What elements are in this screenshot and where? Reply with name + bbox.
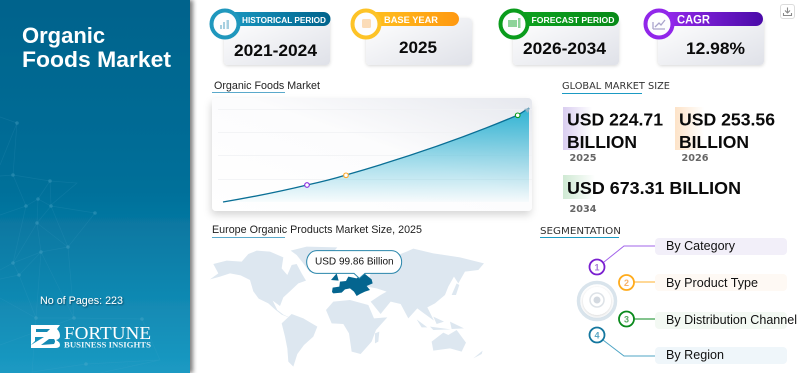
heading: global market size: GLOBAL MARKET SIZE bbox=[562, 81, 670, 92]
marker: 2034 bbox=[515, 113, 520, 118]
diagram: segmentation bbox=[578, 238, 797, 364]
stat: 2025 market size: USD 224.71 bbox=[567, 110, 663, 130]
segment 1: By Category bbox=[590, 238, 787, 274]
segment 1: By Category: 1 bbox=[594, 262, 600, 272]
card: historical period bbox=[212, 10, 330, 65]
stat: 2025 market size bbox=[563, 107, 663, 164]
stat: 2025 market size: 2025 bbox=[570, 153, 597, 164]
segment 2: By Product Type: By Product Type bbox=[666, 276, 758, 290]
heading: segmentation: SEGMENTATION bbox=[540, 226, 621, 237]
segment 3: By Distribution Channel: By Distribution Channel bbox=[666, 313, 797, 327]
logo: Fortune Business Insights: FORTUNE bbox=[64, 323, 151, 343]
card: forecast period: FORECAST PERIOD bbox=[532, 15, 614, 25]
card: base year bbox=[352, 10, 472, 65]
card: CAGR: CAGR bbox=[677, 14, 711, 26]
card: historical period: HISTORICAL PERIOD bbox=[242, 15, 326, 25]
heading: Organic Foods Market: Organic Foods Market bbox=[214, 80, 320, 92]
stat: 2034 market size bbox=[563, 175, 741, 215]
stat: 2026 market size: 2026 bbox=[682, 153, 709, 164]
stat: 2026 market size bbox=[675, 107, 775, 164]
title: Organic bbox=[22, 23, 105, 48]
card: CAGR: 12.98% bbox=[686, 39, 745, 58]
icon: calendar bbox=[362, 19, 371, 28]
world map bbox=[210, 247, 484, 367]
stat: 2025 market size: BILLION bbox=[567, 132, 637, 152]
title: Foods Market bbox=[22, 47, 172, 72]
card: CAGR bbox=[646, 10, 764, 65]
marker: 2025 bbox=[305, 183, 309, 187]
chart: market growth bbox=[212, 98, 532, 211]
card: base year: 2025 bbox=[399, 38, 437, 57]
area fill bbox=[223, 108, 529, 202]
callout: USD 99.86 Billion bbox=[307, 251, 402, 278]
card: forecast period: 2026-2034 bbox=[523, 39, 607, 58]
icon: growth chart bbox=[653, 20, 665, 29]
segment 4: By Region: 4 bbox=[594, 330, 600, 340]
center hub icon bbox=[578, 282, 616, 320]
segment 4: By Region bbox=[590, 328, 787, 364]
icon: bar chart bbox=[220, 20, 229, 29]
card: forecast period bbox=[500, 10, 619, 65]
segment 1: By Category: By Category bbox=[666, 239, 736, 253]
segment 2: By Product Type bbox=[619, 274, 787, 291]
stat: 2026 market size: BILLION bbox=[679, 132, 749, 152]
heading: Europe market size: Europe Organic Products Market Size, 2025 bbox=[212, 224, 422, 236]
stat: 2026 market size: USD 253.56 bbox=[679, 110, 775, 130]
panel: sidebar bbox=[0, 0, 190, 373]
card: historical period: 2021-2024 bbox=[234, 41, 318, 60]
stat: 2034 market size: 2034 bbox=[570, 204, 597, 215]
segment 4: By Region: By Region bbox=[666, 348, 724, 362]
callout: USD 99.86 Billion: USD 99.86 Billion bbox=[315, 257, 394, 268]
stat: 2034 market size: USD 673.31 BILLION bbox=[567, 178, 741, 198]
highlighted region: Europe bbox=[331, 273, 373, 296]
growth line bbox=[223, 108, 529, 202]
segment 2: By Product Type: 2 bbox=[624, 278, 629, 288]
page count: No of Pages: 223 bbox=[40, 295, 123, 307]
logo: Fortune Business Insights bbox=[31, 323, 152, 350]
card: base year: BASE YEAR bbox=[384, 15, 438, 26]
icon: download button bbox=[780, 4, 794, 18]
marker: 2026 bbox=[344, 173, 348, 178]
segment 3: By Distribution Channel bbox=[619, 312, 797, 329]
icon: forecast screen bbox=[508, 18, 520, 28]
logo: Fortune Business Insights: BUSINESS INSIGHTS bbox=[64, 340, 152, 350]
segment 3: By Distribution Channel: 3 bbox=[624, 314, 629, 324]
